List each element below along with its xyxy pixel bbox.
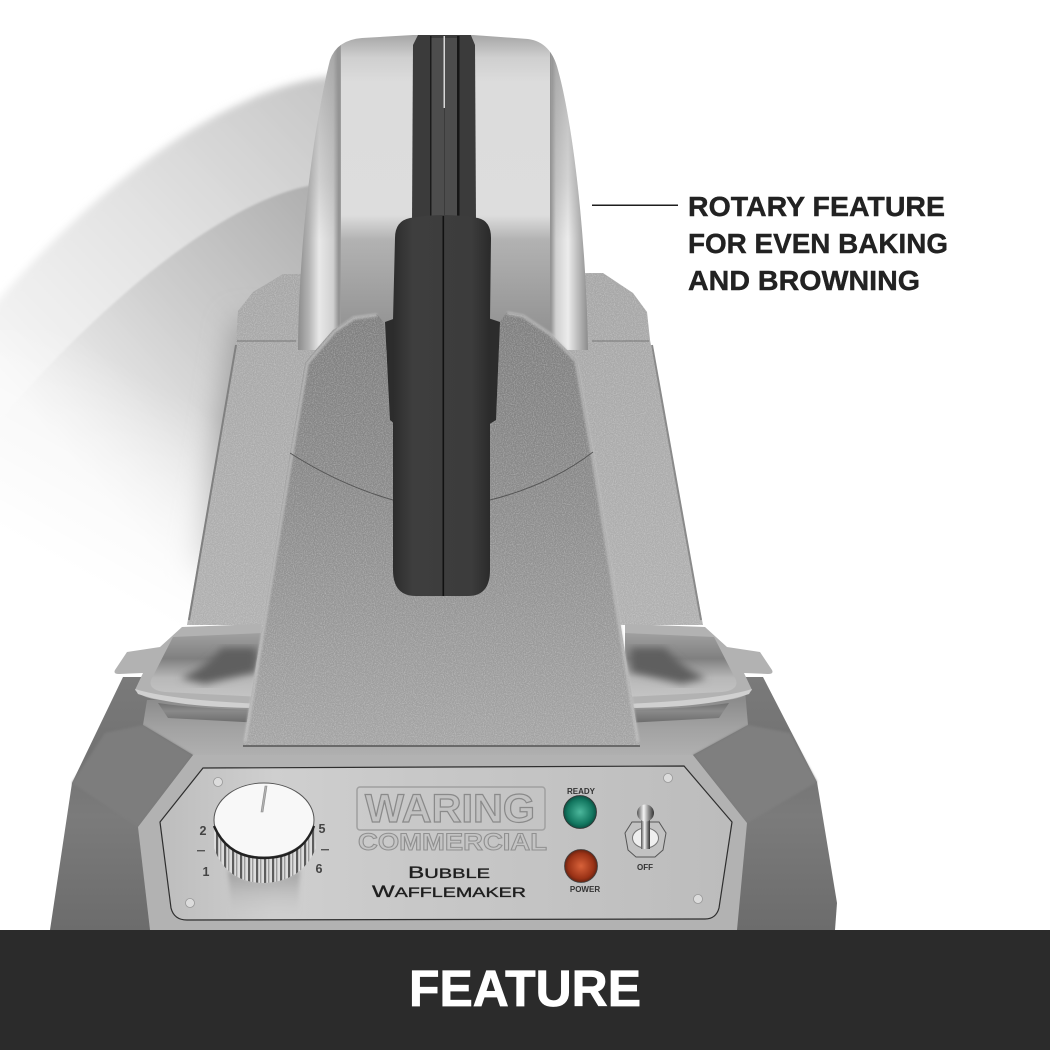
base housing [50,677,837,930]
product name [372,863,526,901]
footer bar [0,930,1050,1050]
dial numbers: 5 [319,822,326,836]
handle side shadows [385,318,500,425]
motion shadow swoosh [0,76,335,660]
callout text: FOR EVEN BAKING [688,228,948,259]
WARING COMMERCIAL embossed logo: WARING [365,787,535,831]
drum centre hinge band [412,33,476,222]
black rotary handle [393,215,491,596]
upper facet left [72,725,193,827]
WARING COMMERCIAL embossed logo [357,787,547,856]
right drip tray [625,624,772,723]
rear base housing [187,273,703,625]
drum right edge [550,52,588,350]
callout: rotary feature [592,191,948,296]
product name: W AFFLEMAKER [372,882,526,901]
drum left edge [298,45,341,350]
toggle switch [625,804,666,915]
drum upper edge shading [310,48,578,220]
callout text: ROTARY FEATURE [688,191,945,222]
dial numbers: 1 [203,865,210,879]
base top deck [143,690,748,755]
stand rim highlights [245,315,377,742]
power indicator: POWER [570,885,600,894]
front handle stand [243,312,640,746]
ready indicator [564,787,596,828]
dial numbers: 2 [200,824,207,838]
WARING COMMERCIAL embossed logo: COMMERCIAL [358,829,547,856]
control panel plate [160,766,732,920]
product name: B UBBLE [408,863,490,882]
stand seam arc [290,452,593,500]
toggle switch: OFF [637,863,653,872]
dial numbers [197,822,329,879]
rivets [186,774,702,908]
dial numbers: 6 [316,862,323,876]
upper facet right [693,725,817,823]
callout leader line [592,204,678,206]
drum centre panels [338,30,552,355]
footer heading: FEATURE [409,960,641,1017]
temperature dial knob [214,783,316,918]
callout text [688,191,948,296]
power indicator [564,850,600,894]
callout text: AND BROWNING [688,265,920,296]
left drip tray [114,624,262,723]
base front frame [138,755,747,930]
base outer shell [50,677,837,930]
waffle drum [295,30,590,355]
ready indicator: READY [567,787,596,796]
